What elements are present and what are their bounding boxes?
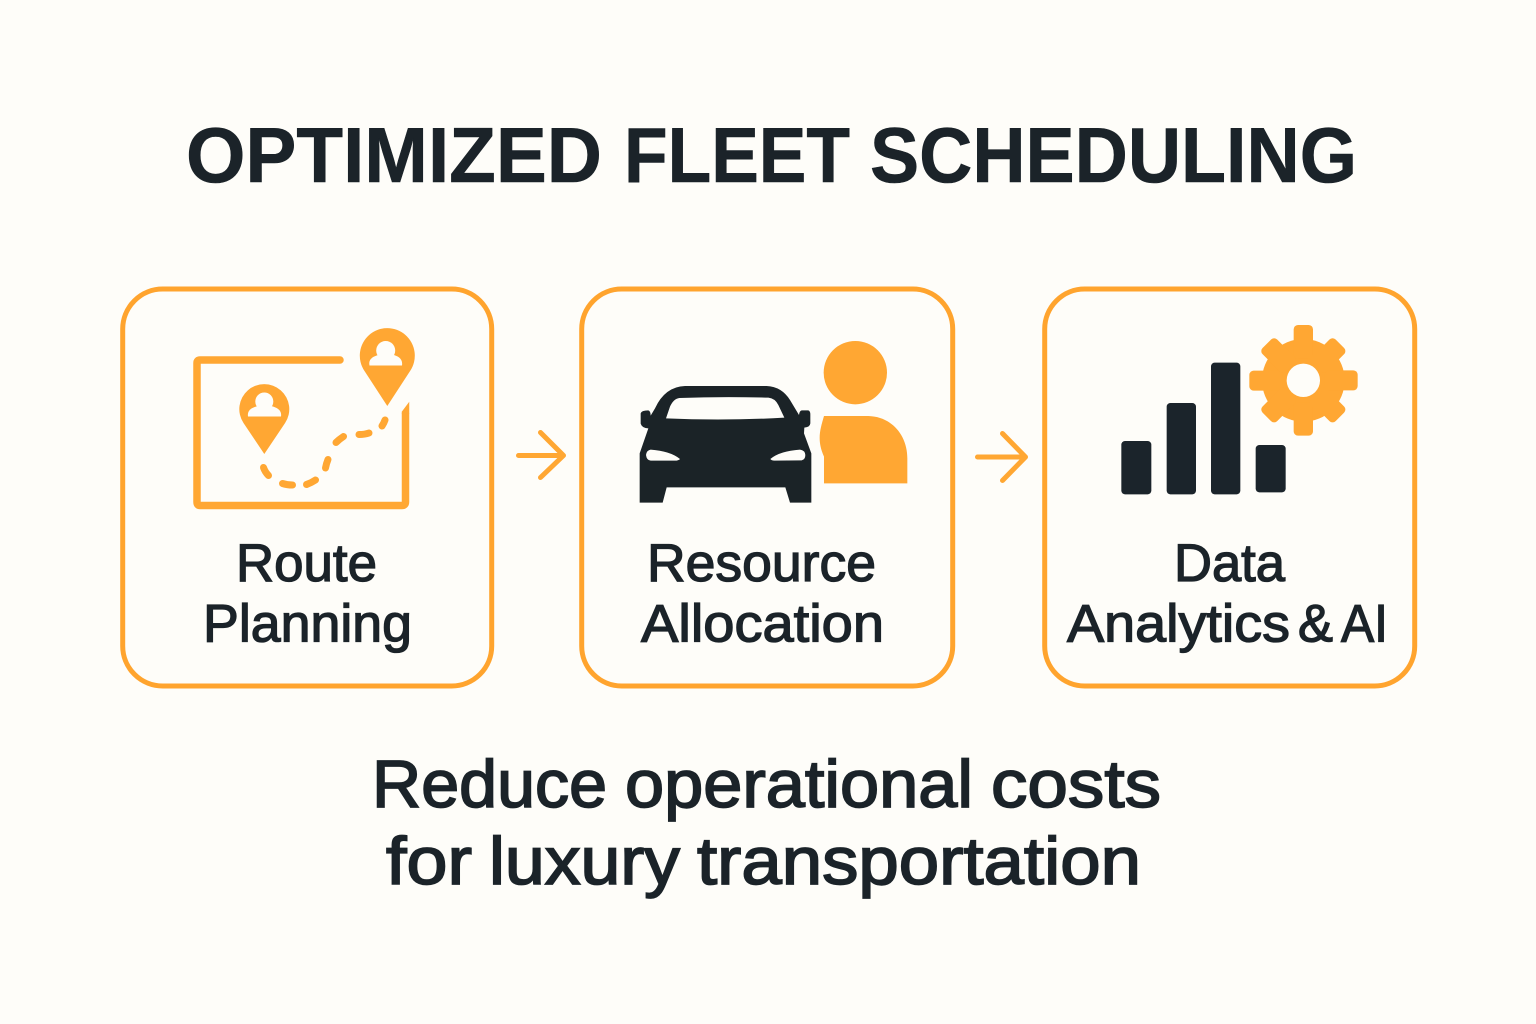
- icon: start pin: [239, 384, 289, 454]
- icon: bar chart: [1121, 363, 1286, 494]
- subtitle: operational: [625, 747, 973, 822]
- label: data analytics and AI: Analytics: [1067, 594, 1290, 654]
- label: resource allocation: [641, 534, 884, 654]
- icon: map with route: [197, 328, 415, 506]
- label: data analytics and AI: [1067, 534, 1388, 654]
- label: resource allocation: Resource: [647, 534, 876, 593]
- label: route planning: [203, 534, 412, 654]
- icon: bars and gear: [1121, 325, 1358, 494]
- subtitle: for: [386, 824, 472, 899]
- panel: route planning: [123, 289, 492, 686]
- icon: person: [820, 341, 907, 483]
- subtitle: luxury: [489, 824, 681, 899]
- arrow: resource to analytics: [978, 434, 1026, 480]
- map frame: [197, 360, 406, 506]
- label: resource allocation: Allocation: [641, 594, 884, 654]
- subtitle: transportation: [697, 824, 1141, 899]
- icon: car and person: [640, 341, 907, 503]
- panel border: resource allocation: [582, 289, 953, 686]
- icon: car: [640, 386, 811, 503]
- panel border: route planning: [123, 289, 492, 686]
- icon: destination pin: [360, 328, 415, 406]
- icon: gear: [1249, 325, 1358, 436]
- title: SCHEDULING: [870, 111, 1357, 199]
- title: FLEET: [624, 111, 850, 199]
- arrow: route to resource: [518, 432, 564, 478]
- title: OPTIMIZED: [186, 111, 602, 199]
- panel border: data analytics: [1045, 289, 1415, 686]
- map frame end: [402, 402, 409, 414]
- subtitle: costs: [991, 747, 1161, 822]
- title: [186, 111, 1357, 199]
- dashed route: [264, 420, 385, 485]
- label: data analytics and AI: AI: [1341, 594, 1388, 654]
- subtitle: Reduce: [372, 747, 607, 822]
- panel: resource allocation: [582, 289, 953, 686]
- label: data analytics and AI: &: [1298, 594, 1333, 654]
- label: route planning: Route: [236, 534, 377, 593]
- label: route planning: Planning: [203, 594, 412, 654]
- label: data analytics and AI: Data: [1174, 534, 1286, 593]
- panel: data analytics and AI: [1045, 289, 1415, 686]
- subtitle: [372, 747, 1161, 899]
